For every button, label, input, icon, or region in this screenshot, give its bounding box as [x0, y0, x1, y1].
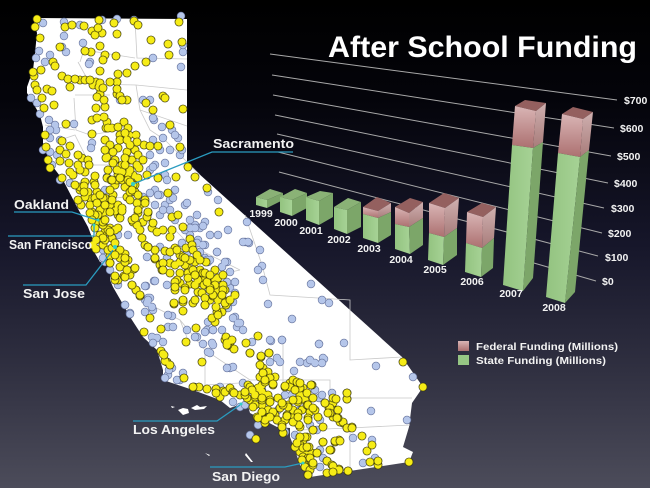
legend: state funding: State Funding (Millions)	[476, 355, 606, 367]
year labels: 2007	[499, 288, 523, 300]
year labels: 2003	[357, 243, 381, 255]
axis labels	[602, 95, 648, 288]
axis labels: $300	[611, 203, 635, 215]
callout: San Diego: San Diego	[212, 469, 280, 484]
blue dots: program sites	[31, 16, 413, 467]
map of California	[27, 16, 423, 477]
callout: Los Angeles: Los Angeles	[133, 422, 215, 437]
axis labels: $600	[620, 123, 644, 135]
year labels: 2008	[542, 302, 566, 314]
year labels: 2000	[274, 217, 298, 229]
bar 1999	[256, 189, 283, 208]
bar 2000	[280, 189, 307, 216]
axis labels: $100	[605, 252, 629, 264]
callout: San Francisco	[8, 224, 96, 252]
grid lines	[270, 54, 617, 281]
bar chart: after school funding	[249, 54, 648, 314]
bar 2002	[334, 198, 361, 234]
islands	[171, 405, 253, 462]
bar 2007	[503, 100, 546, 291]
legend	[458, 341, 618, 367]
year labels: 2001	[299, 225, 323, 237]
axis labels: $0	[602, 276, 614, 288]
callout: San Diego	[210, 462, 304, 484]
year labels: 2002	[327, 234, 351, 246]
callout: Sacramento	[131, 136, 294, 186]
bar 2005	[428, 193, 459, 265]
bar 2008	[546, 107, 593, 303]
callout: Los Angeles	[133, 402, 242, 437]
legend: federal funding: Federal Funding (Millions)	[476, 341, 618, 353]
axis labels: $500	[617, 151, 641, 163]
year labels: 2004	[389, 254, 413, 266]
bar 2003	[363, 197, 391, 243]
callout: San Jose	[23, 245, 117, 301]
callout: San Francisco: San Francisco	[9, 237, 92, 252]
year labels: 2005	[423, 264, 447, 276]
axis labels: $700	[624, 95, 648, 107]
callout: Sacramento: Sacramento	[213, 136, 294, 151]
yellow dots: program sites	[33, 19, 423, 475]
axis labels: $400	[614, 178, 638, 190]
axis labels: $200	[608, 228, 632, 240]
callout: Oakland: Oakland	[14, 197, 69, 212]
bar 2001	[306, 191, 333, 225]
year labels	[249, 208, 566, 314]
callout: San Jose: San Jose	[23, 286, 85, 301]
state outline	[27, 18, 423, 477]
title: After School Funding	[328, 31, 637, 64]
year labels: 1999	[249, 208, 273, 220]
callout: Oakland	[14, 197, 100, 222]
bar 2004	[395, 198, 423, 254]
year labels: 2006	[460, 276, 484, 288]
bar 2006	[465, 203, 496, 277]
